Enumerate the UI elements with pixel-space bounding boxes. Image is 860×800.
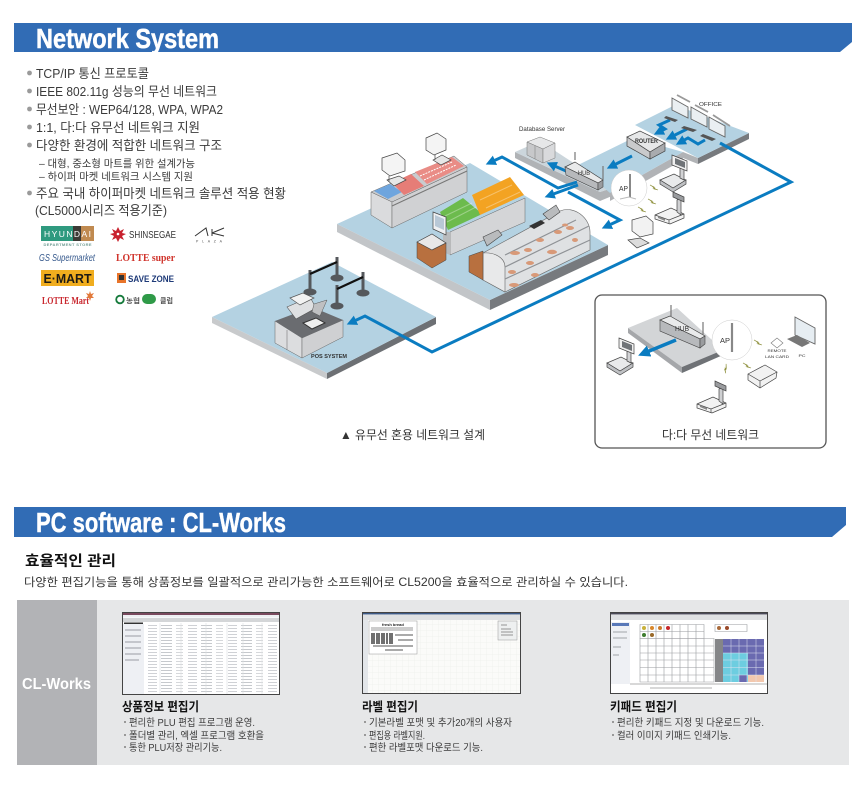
screenshot: keypad editor [610, 612, 768, 694]
logo: AK Plaza: PLAZA [196, 240, 223, 244]
section intro: 다양한 편집기능을 통해 상품정보를 일괄적으로 관리가능한 소프트웨어로 CL5200을 효율적으로 관리하실 수 있습니다. [24, 575, 628, 589]
logo: Hyundai [41, 226, 94, 247]
list: label editor: 기본라벨 포맷 및 추가20개의 사용자 [369, 717, 512, 729]
feature list: TCP/IP 통신 프로토콜 [36, 66, 149, 81]
logo: Hyundai: DEPARTMENT STORE [44, 242, 92, 247]
remote LAN card and PC: LAN CARD [765, 354, 789, 359]
screenshot: product editor [122, 612, 280, 694]
logo: Shinsegae [110, 227, 176, 242]
title: keypad editor: 키패드 편집기 [610, 699, 677, 714]
screenshot: label editor: fresh bread [382, 622, 404, 627]
store floor [337, 163, 608, 310]
heading bar: PC software: PC software : CL-Works [36, 507, 286, 538]
logo: E-Mart: E·MART [44, 271, 92, 286]
feature list: – 대형, 중소형 마트를 위한 설계가능 [39, 157, 195, 170]
router [627, 131, 665, 159]
heading bar: Network System [14, 23, 852, 54]
office workstations: OFFICE [699, 102, 722, 108]
list: keypad editor [612, 717, 764, 742]
logo: Nonghyup: 클럽 [160, 296, 173, 305]
section intro [24, 553, 628, 589]
panel caption: 다:다 무선 네트워크 [662, 428, 759, 442]
network diagram: wired and wireless store [212, 95, 791, 379]
inset hub [660, 305, 705, 348]
logo: Lotte Mart: LOTTE Mart [42, 296, 90, 307]
label: database server: Database Server [519, 126, 566, 133]
logo: Save Zone: SAVE ZONE [128, 274, 174, 285]
office floor [635, 105, 749, 164]
router: ROUTER [635, 139, 659, 145]
inset AP [712, 320, 752, 360]
heading bar: PC software [14, 507, 846, 538]
remote LAN card and PC: REMOTE [768, 348, 787, 353]
side label [17, 600, 97, 765]
hub [565, 152, 603, 190]
list: keypad editor: 편리한 키패드 지정 및 다운로드 기능. [617, 717, 764, 729]
list: product editor: 폴더별 관리, 엑셀 프로그램 호환을 [129, 730, 264, 742]
logo: Hyundai: HYUNDAI [44, 229, 91, 239]
list: label editor [364, 717, 512, 754]
deli counter with scales [371, 133, 467, 228]
screenshot: label editor [362, 612, 520, 694]
inset floor [628, 308, 723, 373]
remote LAN card and PC: PC [798, 353, 806, 358]
title: product editor: 상품정보 편집기 [122, 699, 199, 714]
blue network lines [350, 120, 791, 352]
caption: mixed network: ▲ 유무선 혼용 네트워크 설계 [340, 428, 485, 442]
POS stanchions [304, 257, 370, 310]
inset arrow [642, 340, 676, 354]
wireless scales [628, 155, 687, 248]
hub: HUB [578, 170, 590, 177]
feature list: IEEE 802.11g 성능의 무선 네트워크 [36, 84, 217, 99]
office workstations [664, 95, 730, 141]
list: product editor: 통한 PLU저장 관리기능. [129, 742, 222, 754]
retailer logos [39, 226, 224, 307]
feature list: 다양한 환경에 적합한 네트워크 구조 [36, 138, 222, 153]
logo: Lotte Super: LOTTE super [116, 252, 175, 264]
panel: CL-Works features [17, 600, 849, 765]
panel: many-to-many wireless network [595, 295, 826, 448]
inset scales [607, 338, 777, 413]
list: product editor: 편리한 PLU 편집 프로그램 운영. [129, 717, 255, 729]
feature list: (CL5000시리즈 적용기준) [35, 203, 167, 218]
POS counter [275, 293, 343, 358]
list: product editor [124, 717, 264, 754]
feature list: – 하이퍼 마켓 네트워크 시스템 지원 [39, 170, 193, 183]
logo: Save Zone [117, 273, 174, 285]
logo: Lotte Mart [42, 291, 94, 307]
section intro: 효율적인 관리 [25, 553, 116, 570]
wireless AP [611, 170, 647, 206]
side label: CL-Works [22, 676, 91, 693]
title: label editor: 라벨 편집기 [362, 699, 418, 714]
curved refrigerated case [469, 205, 590, 292]
list: label editor: 편한 라벨포맷 다운로드 기능. [369, 742, 483, 754]
inset AP: AP [720, 336, 730, 345]
feature list: 주요 국내 하이퍼마켓 네트워크 솔루션 적용 현황 [36, 186, 286, 201]
wireless AP: AP [619, 186, 628, 193]
list: label editor: 편집용 라벨지원. [369, 730, 425, 742]
feature list: 1:1, 다:다 유무선 네트워크 지원 [36, 120, 200, 135]
inset hub: HUB [675, 326, 689, 333]
logo: Nonghyup: 농협 [126, 296, 140, 305]
database server [527, 137, 555, 163]
hub and router floor [578, 138, 683, 201]
list: keypad editor: 컬러 이미지 키패드 인쇄기능. [617, 729, 731, 742]
database server floor [515, 141, 612, 201]
logo: Shinsegae: SHINSEGAE [129, 230, 176, 241]
feature list [27, 66, 286, 218]
produce display with prepack station [417, 177, 525, 268]
feature list: 무선보안 : WEP64/128, WPA, WPA2 [36, 102, 223, 117]
POS floor [212, 262, 436, 379]
remote LAN card and PC [765, 317, 815, 359]
logo: Nonghyup [116, 294, 173, 305]
heading bar: Network System: Network System [36, 23, 219, 54]
logo: AK Plaza [195, 228, 224, 244]
label: POS system: POS SYSTEM [311, 354, 347, 360]
logo: GS Supermarket: GS Supermarket [39, 253, 96, 264]
